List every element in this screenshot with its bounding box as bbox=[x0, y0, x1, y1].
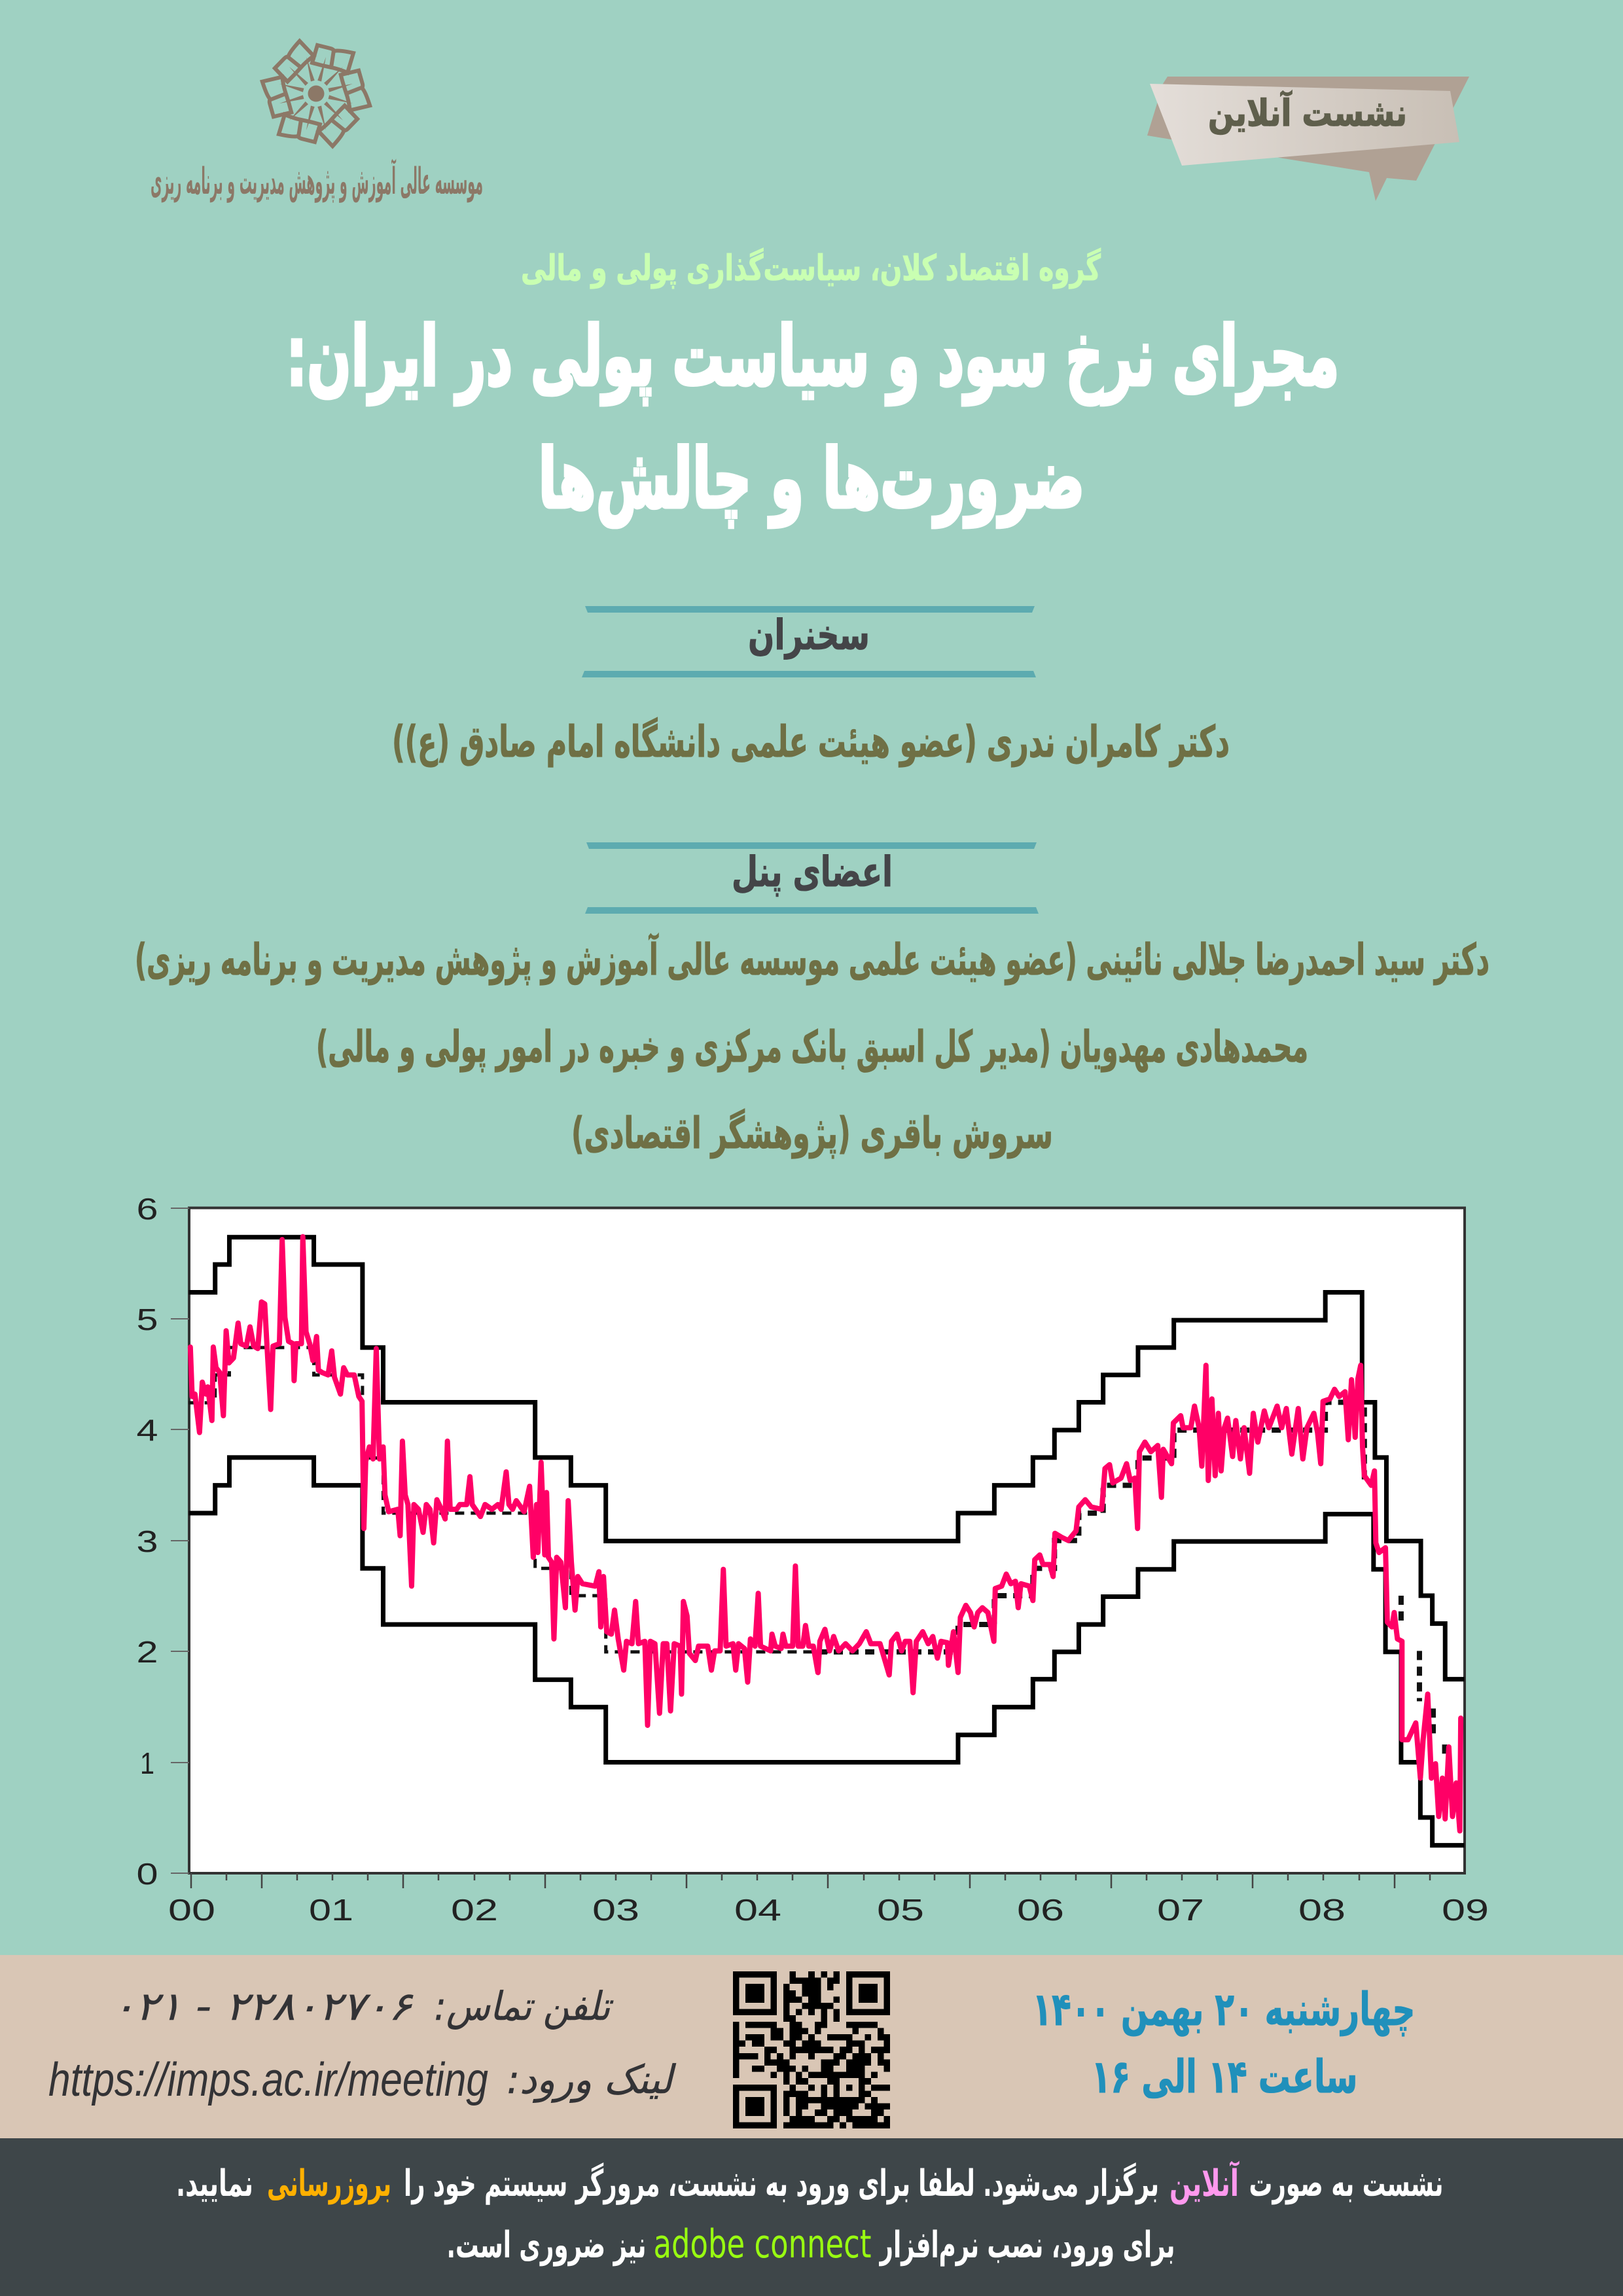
x axis labels and ticks: 00 bbox=[168, 1893, 215, 1927]
QR code bbox=[733, 1971, 890, 2128]
y axis labels and ticks: 2 bbox=[136, 1635, 158, 1669]
plot area bbox=[189, 1208, 1465, 1873]
text: موسسه عالی آموزش و پژوهش مدیریت و برنامه ریزی bbox=[151, 158, 483, 203]
pink overnight rate series bbox=[190, 1236, 1461, 1831]
panel members list bbox=[135, 933, 1489, 1159]
contact phone: ۰۲۱ - ۲۲۸۰۲۷۰۶ bbox=[112, 1984, 414, 2030]
x axis labels and ticks: 01 bbox=[309, 1893, 353, 1927]
y axis labels and ticks: 1 bbox=[140, 1746, 154, 1780]
x axis labels and ticks: 04 bbox=[734, 1893, 781, 1927]
y axis labels and ticks: 6 bbox=[136, 1192, 158, 1226]
instruction line 2 bbox=[446, 2221, 1175, 2267]
instruction line 2: نیز ضروری است. bbox=[446, 2224, 647, 2267]
title line 2: ضرورت‌ها و چالش‌ها bbox=[538, 431, 1085, 528]
date and time: ساعت ۱۴ الی ۱۶ bbox=[1092, 2050, 1357, 2104]
instruction line 2: برای ورود، نصب نرم‌افزار bbox=[879, 2224, 1175, 2267]
badge: online session ribbon bbox=[1147, 77, 1469, 201]
entry link: لینک ورود: bbox=[507, 2057, 677, 2103]
x axis labels and ticks bbox=[168, 1873, 1489, 1927]
date and time bbox=[1033, 1982, 1415, 2104]
date and time: چهارشنبه ۲۰ بهمن ۱۴۰۰ bbox=[1033, 1982, 1415, 2037]
panel: contact and date strip bbox=[0, 1955, 1623, 2138]
title bbox=[287, 308, 1339, 528]
y axis labels and ticks bbox=[136, 1192, 189, 1891]
instruction line 1: نمایید. bbox=[176, 2162, 253, 2205]
heading: panel members: اعضای پنل bbox=[732, 848, 893, 897]
subtitle: research group: گروه اقتصاد کلان، سیاست‌گذاری پولی و مالی bbox=[521, 247, 1101, 289]
upper corridor band bbox=[189, 1237, 1465, 1679]
y axis labels and ticks: 3 bbox=[136, 1524, 158, 1558]
x axis labels and ticks: 06 bbox=[1017, 1893, 1064, 1927]
panel: online instructions footer bbox=[0, 2138, 1623, 2296]
y axis labels and ticks: 0 bbox=[136, 1857, 158, 1891]
x axis labels and ticks: 05 bbox=[877, 1893, 924, 1927]
heading: panel members bbox=[585, 842, 1039, 914]
contact phone: تلفن تماس: bbox=[435, 1984, 613, 2030]
corridor target dashed line bbox=[189, 1348, 1445, 1754]
panel member 3: سروش باقری (پژوهشگر اقتصادی) bbox=[571, 1108, 1053, 1159]
logo: institute emblem and name bbox=[151, 37, 483, 203]
x axis labels and ticks: 02 bbox=[451, 1893, 498, 1927]
line chart: interest rate corridor 2000-2009 bbox=[136, 1192, 1489, 1927]
icon: book rosette emblem bbox=[255, 37, 377, 150]
contact phone bbox=[112, 1984, 613, 2030]
instruction line 1: بروزرسانی bbox=[267, 2162, 391, 2205]
instruction line 2: adobe connect bbox=[653, 2221, 872, 2267]
lower corridor band bbox=[189, 1458, 1465, 1845]
heading: speaker: سخنران bbox=[748, 611, 870, 660]
y axis labels and ticks: 5 bbox=[136, 1302, 158, 1336]
y axis labels and ticks: 4 bbox=[136, 1413, 158, 1447]
instruction line 1: نشست به صورت bbox=[1249, 2162, 1444, 2205]
x axis labels and ticks: 09 bbox=[1442, 1893, 1489, 1927]
instruction line 1: آنلاین bbox=[1169, 2161, 1240, 2205]
x axis labels and ticks: 07 bbox=[1157, 1893, 1204, 1927]
x axis labels and ticks: 03 bbox=[592, 1893, 639, 1927]
instruction line 1: برگزار می‌شود. لطفا برای ورود به نشست، مرورگر سیستم خود را bbox=[404, 2162, 1159, 2205]
heading: speaker bbox=[582, 606, 1036, 677]
x axis labels and ticks: 08 bbox=[1298, 1893, 1346, 1927]
entry link: https://imps.ac.ir/meeting bbox=[48, 2054, 488, 2106]
badge text: نشست آنلاین bbox=[1208, 90, 1407, 135]
